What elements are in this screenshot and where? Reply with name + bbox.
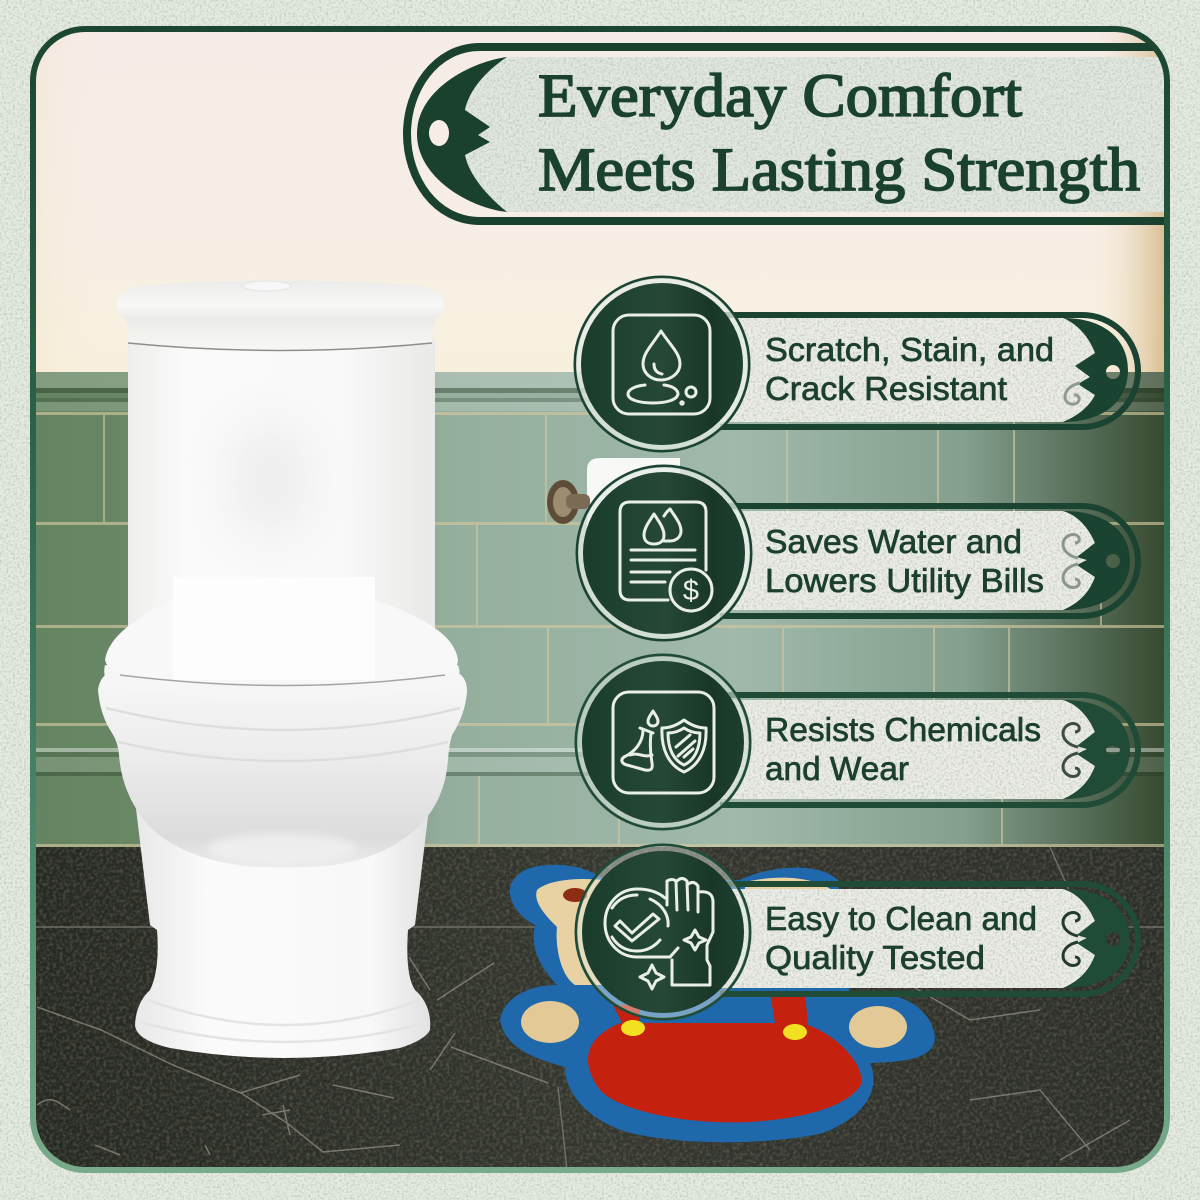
pill 3 xyxy=(720,695,1138,805)
toilet xyxy=(98,280,467,1058)
pedestal base detail xyxy=(140,1000,428,1042)
title text: Everyday Comfort xyxy=(538,63,1022,130)
label 1: Scratch, Stain, and xyxy=(765,331,1054,368)
feature 1: scratch, stain and crack resistant xyxy=(575,277,1138,451)
feature 2: saves water and lowers utility bills xyxy=(577,466,1138,640)
rug face xyxy=(536,878,835,985)
label 2: Lowers Utility Bills xyxy=(765,562,1044,599)
feature 4: easy to clean and quality tested xyxy=(576,845,1138,1019)
toilet pedestal xyxy=(135,790,430,1058)
rug red overalls xyxy=(588,993,862,1122)
bowl highlight xyxy=(211,833,353,858)
white retouch patch xyxy=(364,577,375,600)
toilet tank xyxy=(128,340,435,640)
pill 2 xyxy=(720,506,1138,616)
bear rug xyxy=(500,865,935,1142)
toilet seat xyxy=(105,606,458,668)
seat gap line xyxy=(120,675,445,686)
banner paper xyxy=(465,57,1167,212)
label 2 xyxy=(765,523,1044,599)
label 3 xyxy=(765,711,1041,787)
banner crescent xyxy=(417,57,507,212)
icon: glove and quality check xyxy=(605,878,713,989)
bowl rim lines xyxy=(106,708,460,761)
lid seam xyxy=(128,343,432,350)
marble floor xyxy=(33,847,1167,1172)
label 3: and Wear xyxy=(765,750,909,787)
cream wall xyxy=(33,29,1167,374)
rug outline xyxy=(500,865,935,1142)
title text: Meets Lasting Strength xyxy=(538,137,1140,204)
dollar sign: $ xyxy=(683,575,699,607)
toilet bowl xyxy=(98,668,467,868)
green tile wall xyxy=(33,372,1167,850)
banner outline xyxy=(407,47,1170,221)
label 1: Crack Resistant xyxy=(765,370,1007,407)
badge 4 xyxy=(576,845,750,1019)
tank lid xyxy=(117,280,444,343)
label 3: Resists Chemicals xyxy=(765,711,1041,748)
label 2: Saves Water and xyxy=(765,523,1022,560)
rug paws xyxy=(521,1001,579,1043)
flush button xyxy=(243,281,291,291)
icon: chemical flask and shield xyxy=(613,692,714,793)
title text xyxy=(538,63,1140,204)
tank shading xyxy=(242,443,298,517)
rug nose spot xyxy=(563,888,587,902)
feature 3: resists chemicals and wear xyxy=(576,655,1138,829)
pill 1 xyxy=(720,315,1138,427)
pill 4 xyxy=(720,884,1138,994)
title banner xyxy=(407,47,1170,221)
label 4 xyxy=(765,900,1037,976)
rug buttons xyxy=(621,1020,645,1036)
toilet paper holder xyxy=(547,458,680,528)
icon: water bill xyxy=(620,502,712,611)
badge 1 xyxy=(575,277,749,451)
label 1 xyxy=(765,331,1054,407)
icon: water drop on surface xyxy=(613,315,710,414)
label 4: Quality Tested xyxy=(765,939,985,976)
label 4: Easy to Clean and xyxy=(765,900,1037,937)
badge 2 xyxy=(577,466,751,640)
seat lower band xyxy=(104,665,460,676)
badge 3 xyxy=(576,655,750,829)
